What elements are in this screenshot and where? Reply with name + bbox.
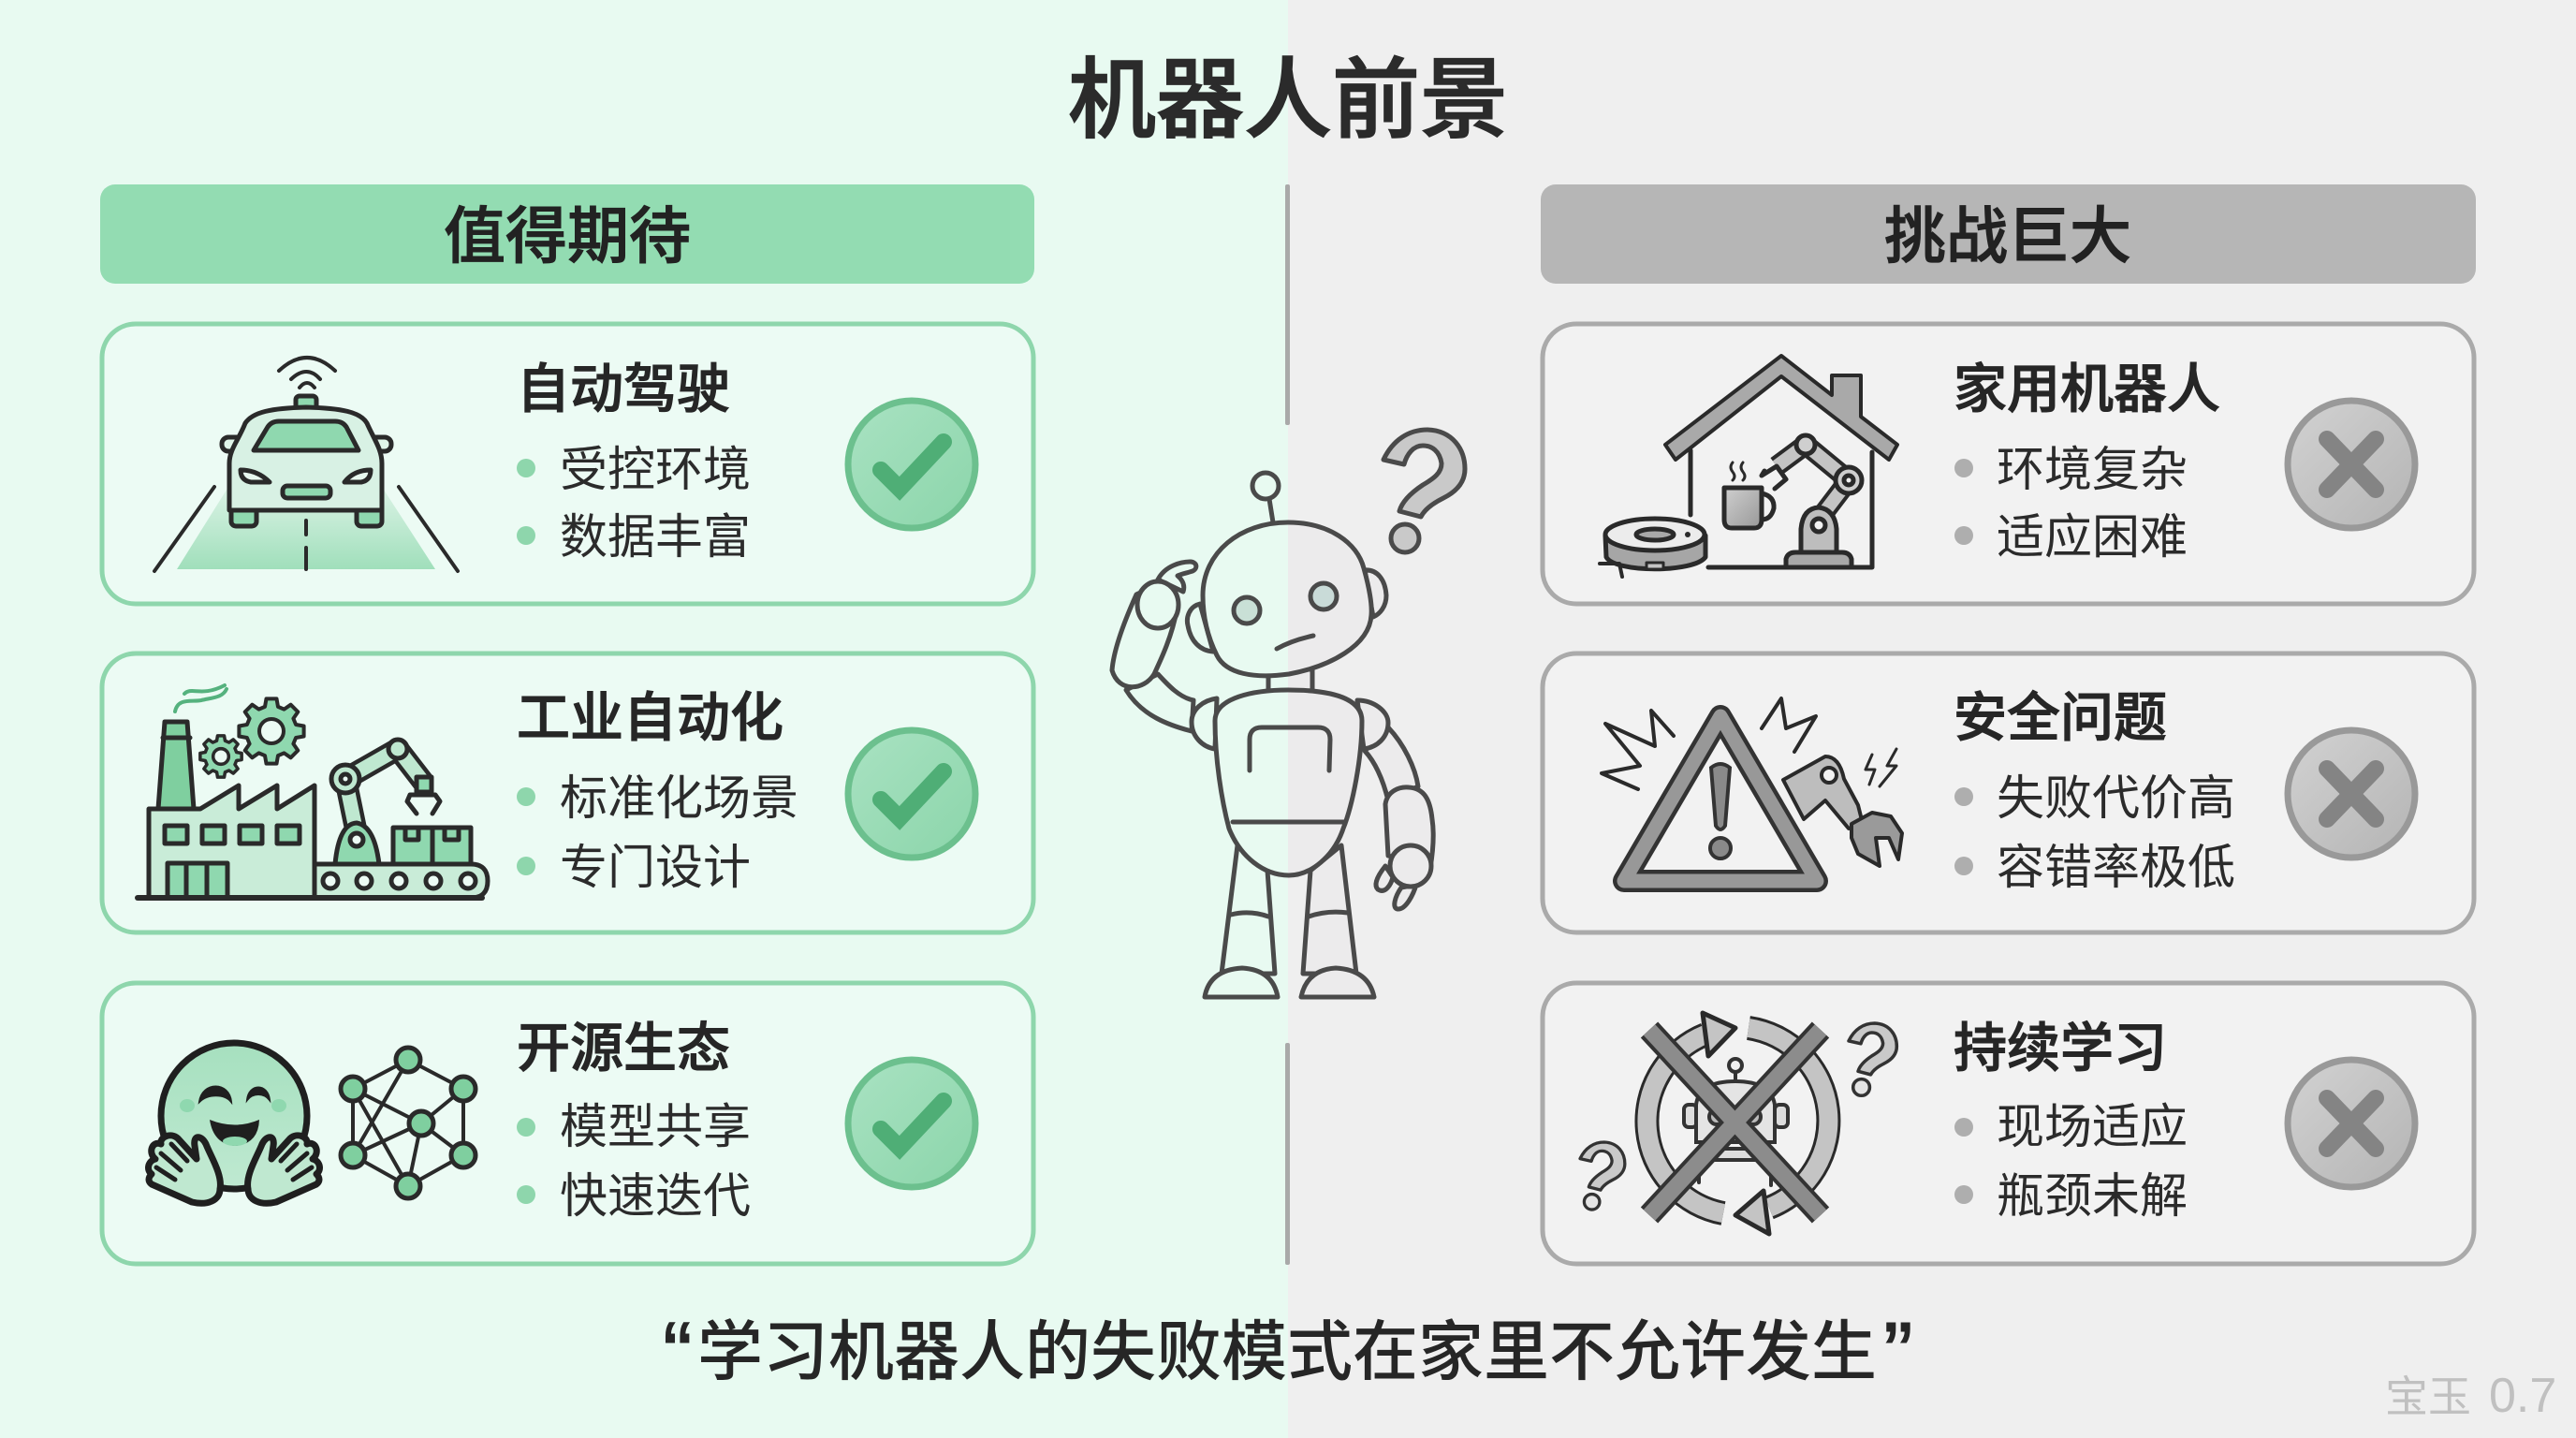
panel: safety [1543, 653, 2474, 932]
card title: 工业自动化 [517, 688, 783, 748]
bullet: 模型共享 [560, 1100, 751, 1153]
bullet: 数据丰富 [560, 510, 751, 564]
panel: open source ecosystem [102, 983, 1033, 1264]
robot legs [1205, 845, 1374, 997]
icon: check mark [848, 401, 975, 528]
icon: house with robot arm and vacuum [1600, 356, 1897, 577]
icon: small question mark right [1849, 1023, 1896, 1095]
divider top [1285, 184, 1290, 425]
panel: continual learning [1543, 983, 2474, 1264]
robot mouth [1277, 636, 1313, 649]
card title: 自动驾驶 [517, 360, 730, 419]
title: 机器人前景 [1068, 51, 1508, 149]
bullet: 环境复杂 [1997, 443, 2188, 496]
bullet: 瓶颈未解 [1997, 1169, 2188, 1223]
panel: industrial automation [102, 653, 1033, 932]
header: promising [100, 184, 1034, 284]
bullet: 快速迭代 [560, 1169, 751, 1223]
icon: hugging face [149, 1043, 319, 1203]
divider bottom [1285, 1043, 1290, 1265]
icon: warning triangle and broken arm [1602, 698, 1902, 881]
icon: question mark [1383, 430, 1465, 552]
card title: 持续学习 [1954, 1019, 2167, 1078]
robot shoulders [1192, 698, 1388, 749]
icon: crossed-out learning cycle [1647, 1013, 1828, 1234]
header: challenges: 挑战巨大 [1884, 201, 2131, 271]
background right [1288, 0, 2576, 1438]
watermark: 0.7 [2489, 1369, 2556, 1423]
bottom quote: ” [1883, 1304, 1913, 1403]
icon: check mark [848, 730, 975, 858]
bottom quote: 学习机器人的失败模式在家里不允许发生 [697, 1315, 1877, 1388]
bottom quote [663, 1304, 1913, 1403]
bullet: 现场适应 [1997, 1100, 2188, 1153]
bullet: 受控环境 [560, 443, 751, 496]
robot antenna [1252, 473, 1279, 522]
icon: cross mark [2288, 1060, 2415, 1187]
robot eyes [1234, 583, 1337, 624]
icon: network graph [341, 1048, 476, 1198]
card title: 安全问题 [1954, 688, 2167, 748]
icon: small question mark left [1580, 1142, 1625, 1210]
icon: cross mark [2288, 730, 2415, 858]
bullet: 专门设计 [560, 841, 751, 894]
icon: self-driving car [154, 358, 458, 571]
watermark: 宝玉 [2385, 1372, 2471, 1421]
robot ears [1187, 570, 1386, 652]
bullet: 适应困难 [1997, 510, 2188, 564]
icon: check mark [848, 1060, 975, 1187]
bullet: 容错率极低 [1997, 841, 2235, 894]
robot torso [1215, 690, 1362, 875]
icon: factory and robot arm [138, 685, 488, 898]
robot head [1203, 522, 1371, 676]
robot neck [1268, 669, 1312, 693]
card title: 开源生态 [517, 1019, 730, 1078]
background left [0, 0, 1288, 1438]
header: challenges [1541, 184, 2476, 284]
bullet: 失败代价高 [1997, 771, 2235, 825]
header: promising: 值得期待 [444, 201, 691, 271]
panel: home robots [1543, 324, 2474, 604]
bullet: 标准化场景 [560, 771, 798, 825]
panel: autonomous driving [102, 324, 1033, 604]
bottom quote: “ [663, 1304, 693, 1403]
robot figure [1112, 473, 1433, 997]
icon: cross mark [2288, 401, 2415, 528]
robot raised arm [1112, 562, 1196, 731]
card title: 家用机器人 [1954, 360, 2220, 419]
robot lowered arm [1365, 727, 1433, 909]
